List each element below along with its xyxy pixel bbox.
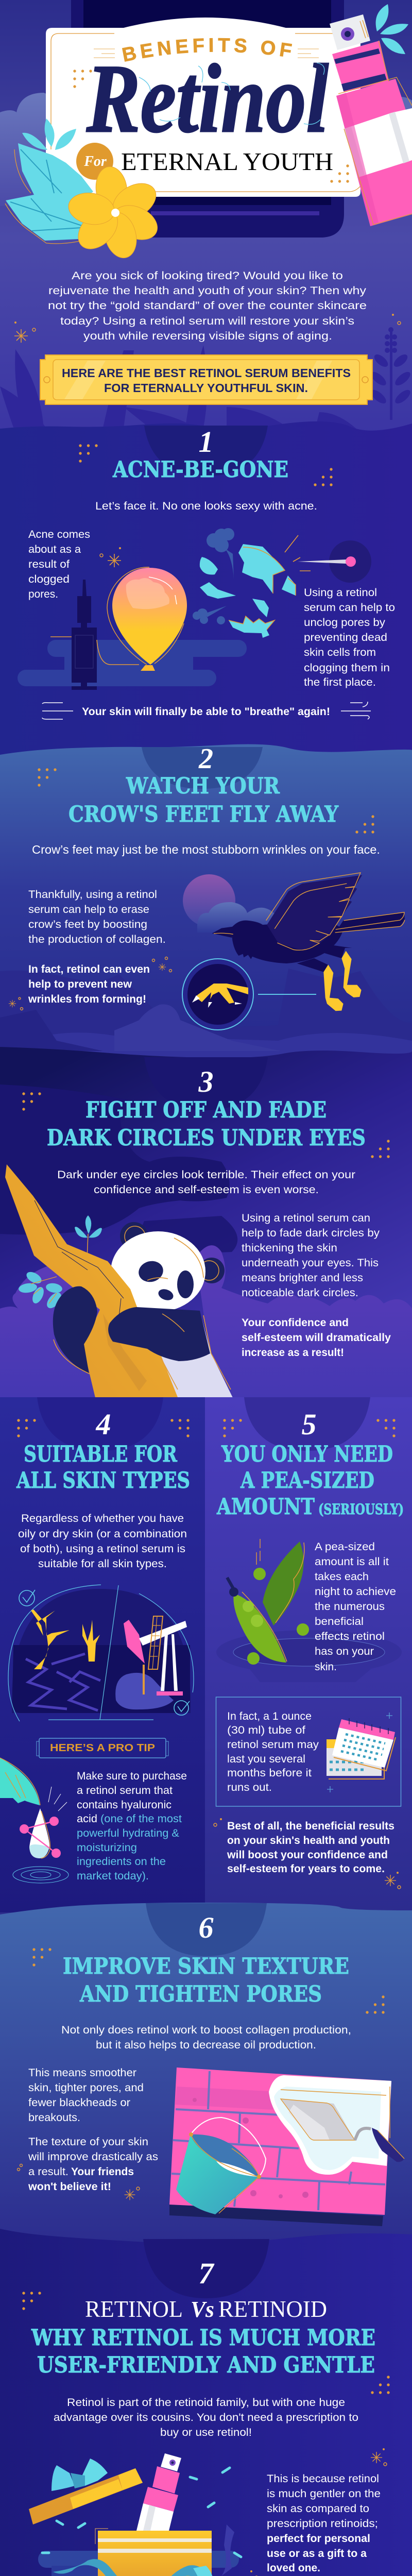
sparkles: section 1	[100, 547, 121, 567]
text: one ounce: retinol serum may	[227, 1739, 319, 1751]
badge: For: For	[83, 154, 107, 170]
title: Eternal Youth: ETERNAL YOUTH	[121, 147, 333, 176]
banner: best retinol serum benefits: HERE ARE THE BEST RETINOL SERUM BENEFITS	[62, 366, 351, 380]
text: gentler on skin: is much gentler on the	[267, 2488, 381, 2500]
panel: section 5 background	[205, 1397, 412, 1912]
illustration: leaf, drop and molecules	[0, 1758, 68, 1883]
dots: section 5 left	[223, 1419, 242, 1437]
icon: leaves on branch	[18, 1215, 102, 1311]
text: fade dark circles: noticeable dark circles.	[242, 1287, 358, 1299]
intro text section 6: Not only does retinol work to boost collagen production,	[61, 2024, 351, 2036]
text: texture improves: will improve drastically as	[28, 2151, 158, 2163]
text: confidence increases: self-esteem will dramatically	[242, 1332, 391, 1344]
text: best of all: will boost your confidence and	[227, 1849, 388, 1861]
text: thankfully: the production of collagen.	[28, 934, 166, 945]
text: best of all	[227, 1820, 394, 1875]
heading: watch your crow's feet: CROW'S FEET FLY AWAY	[68, 802, 339, 827]
dots: section 6 left	[32, 1948, 52, 1967]
text: gentler on skin: loved one.	[267, 2562, 320, 2574]
text: acne comes about	[28, 529, 90, 600]
text: pea-sized amount: takes each	[315, 1571, 369, 1583]
dots: section 1 right	[314, 468, 333, 486]
sparkles: section 7	[250, 2448, 387, 2576]
text: pro tip	[77, 1770, 187, 1882]
icon: ribbons	[53, 2524, 235, 2576]
text: gentler on skin: prescription retinoids;	[267, 2518, 378, 2530]
text: texture improves	[28, 2136, 158, 2193]
text: texture improves: Your friends	[71, 2166, 134, 2178]
text: confidence increases: increase as a result!	[242, 1347, 344, 1359]
dots: section 4 right	[170, 1419, 190, 1437]
foliage behind the banner	[0, 327, 412, 433]
icon: serum bottle in gift box	[136, 2453, 181, 2531]
banner: best retinol serum benefits	[40, 355, 372, 404]
sparkles: section 5	[214, 1818, 401, 1889]
text: pro tip: powerful hydrating &	[77, 1827, 179, 1839]
heading: improve skin texture: AND TIGHTEN PORES	[79, 1981, 322, 2007]
intro paragraph	[48, 270, 367, 342]
icon: yellow flower	[66, 165, 163, 262]
heading: retinol vs retinoid: Vs	[191, 2297, 214, 2322]
icon: pin	[285, 535, 371, 583]
text: pro tip: acid	[77, 1813, 97, 1825]
text: fade dark circles: thickening the skin	[242, 1242, 337, 1254]
background: dusk hills	[0, 969, 412, 1061]
heading: watch your crow's feet	[68, 773, 339, 827]
panel: hero background	[0, 0, 412, 433]
number 1: 1	[199, 425, 213, 459]
icon: balloon	[107, 567, 187, 671]
dots: section 3 left	[22, 1092, 41, 1111]
illustration: plastered brick wall	[169, 2067, 404, 2226]
text: regardless of skin: suitable for all skin types.	[38, 1558, 167, 1570]
title highlights	[139, 63, 324, 124]
text: fade dark circles: underneath your eyes. This	[242, 1257, 379, 1269]
heading: suitable for all skin types: SUITABLE FOR	[24, 1442, 177, 1467]
text: regardless of skin: of both), using a retinol serum is	[20, 1543, 185, 1555]
icon: calendars	[327, 1713, 396, 1792]
heading: fight off and fade	[47, 1097, 366, 1151]
icon: serum bottle	[330, 14, 412, 226]
sparkles: section 6	[18, 2164, 140, 2200]
number 4: 4	[96, 1408, 111, 1441]
text: gentler on skin: skin as compared to	[267, 2503, 369, 2515]
text: retinol serum unclogs pores: clogging them in	[304, 662, 390, 674]
intro text section 3: confidence and self-esteem is even worse.	[94, 1184, 319, 1196]
number 2: 2	[198, 743, 213, 775]
dots: section 7 right	[371, 2376, 390, 2394]
icon: crow	[212, 873, 405, 1011]
text: confidence increases: Your confidence and	[242, 1317, 349, 1329]
dots: section 7 left	[22, 2292, 41, 2310]
text: smoother skin: breakouts.	[28, 2112, 80, 2124]
text: pea-sized amount	[315, 1541, 396, 1673]
intro paragraph: not try the “gold standard” of over the counter skincare	[48, 300, 367, 312]
illustration: cloud platform	[18, 640, 247, 686]
intro text section 7	[54, 2397, 358, 2438]
text: acne comes about: Acne comes	[28, 529, 90, 540]
text: regardless of skin: oily or dry skin (or a combination	[18, 1528, 187, 1540]
text: in fact retinol: help to prevent new	[28, 978, 132, 990]
panel: section 4 background	[0, 1397, 205, 1912]
text: retinol serum unclogs pores	[304, 587, 395, 688]
text: one ounce: (30 ml) tube of	[227, 1724, 305, 1736]
text: smoother skin: fewer blackheads or	[28, 2097, 130, 2109]
text: one ounce	[227, 1710, 319, 1793]
background: purple bushes	[0, 1245, 412, 1404]
panel: section 7 background	[0, 2229, 412, 2576]
dots: section 4 left	[17, 1419, 36, 1437]
text: best of all: Best of all, the beneficial results	[227, 1820, 394, 1832]
dots: section 5 right	[376, 1419, 396, 1437]
text: best of all: self-esteem for years to come.	[227, 1863, 385, 1875]
text: acne comes about: pores.	[28, 588, 58, 600]
icon: panda	[5, 1164, 234, 1400]
heading: retinol vs retinoid: RETINOL	[85, 2296, 183, 2322]
icon: confetti	[42, 2468, 241, 2557]
text: pro tip: market today).	[77, 1870, 149, 1882]
dots: section 3 right	[371, 1140, 390, 1158]
text: retinol serum unclogs pores: the first place.	[304, 676, 376, 688]
text: gentler on skin: perfect for personal	[267, 2533, 370, 2545]
text: fade dark circles: Using a retinol serum can	[242, 1212, 370, 1224]
illustration: dry land and oil rig	[8, 1585, 194, 1721]
heading: pea-sized amount	[216, 1442, 404, 1520]
dots: section 2 right	[355, 815, 374, 834]
intro text section 3: Dark under eye circles look terrible. Their effect on your	[57, 1169, 355, 1181]
panel: section 1 background	[0, 421, 412, 757]
panel: section 6 background	[0, 1903, 412, 2246]
panel: section 3 background	[0, 1047, 412, 1404]
banner: best retinol serum benefits: FOR ETERNALLY YOUTHFUL SKIN.	[104, 381, 308, 395]
panel: dark frame behind the title card	[71, 0, 344, 238]
icon: bucket	[176, 2117, 266, 2214]
background: clouds	[114, 902, 281, 1051]
text: smoother skin	[28, 2067, 144, 2124]
panel: one ounce tube box	[216, 1697, 401, 1806]
number 6: 6	[199, 1911, 213, 1944]
text: gentler on skin: use or as a gift to a	[267, 2548, 367, 2560]
number bowl 1	[144, 426, 268, 476]
illustration: popped balloon pieces	[193, 528, 296, 638]
illustration: pea pods	[216, 1539, 402, 1682]
intro paragraph: Are you sick of looking tired? Would you like to	[72, 270, 343, 282]
text: retinol serum unclogs pores: serum can help to	[304, 602, 395, 614]
text: fade dark circles: means brighter and less	[242, 1272, 363, 1284]
intro paragraph: rejuvenate the health and youth of your skin? Then why	[48, 285, 367, 297]
dots: section 1 left	[79, 444, 98, 463]
text: thankfully: serum can help to erase	[28, 904, 149, 916]
heading: suitable for all skin types: ALL SKIN TYPES	[16, 1468, 190, 1494]
cloud: hero right	[391, 97, 412, 155]
text: regardless of skin	[18, 1513, 187, 1570]
text: smoother skin: skin, tighter pores, and	[28, 2082, 144, 2094]
text: pea-sized amount: skin.	[315, 1661, 337, 1673]
text: in fact retinol	[28, 963, 150, 1005]
text: pea-sized amount: the numerous	[315, 1601, 385, 1613]
icon: moon	[183, 874, 235, 927]
number bowl 3	[144, 1057, 268, 1110]
sparkles: intro left	[14, 321, 36, 343]
text: pro tip: (one of the most	[100, 1813, 182, 1825]
text: in fact retinol: In fact, retinol can even	[28, 963, 150, 975]
text: retinol serum unclogs pores: Using a retinol	[304, 587, 377, 599]
text: fade dark circles	[242, 1212, 380, 1299]
heading: fight off and fade: DARK CIRCLES UNDER EYES	[47, 1125, 366, 1151]
illustration: cloud platform section 7	[8, 2551, 239, 2576]
text: retinol serum unclogs pores: preventing dead	[304, 632, 387, 643]
icon: gift lid and bow	[29, 2459, 143, 2524]
text: acne comes about: result of	[28, 558, 70, 570]
text: pro tip: Make sure to purchase	[77, 1770, 187, 1782]
text: in fact retinol: wrinkles from forming!	[28, 993, 146, 1005]
text: pea-sized amount: A pea-sized	[315, 1541, 375, 1553]
intro text section 3	[57, 1169, 355, 1196]
number bowl 7	[143, 2239, 269, 2298]
heading: acne-be-gone: ACNE-BE-GONE	[112, 457, 288, 483]
heading: retinol vs retinoid	[31, 2296, 375, 2378]
text: thankfully: crow’s feet by boosting	[28, 919, 147, 930]
intro text section 7: buy or use retinol!	[160, 2427, 252, 2438]
cloud: hero left	[0, 93, 52, 206]
text: best of all: on your skin's health and youth	[227, 1835, 390, 1846]
number bowl 6	[146, 1903, 267, 1956]
text: texture improves: a result.	[28, 2166, 68, 2178]
icon: leaves left	[5, 118, 93, 244]
background: dark tree silhouette	[0, 1084, 237, 1252]
text: pro tip: contains hyaluronic	[77, 1799, 171, 1811]
text: fade dark circles: help to fade dark circles by	[242, 1227, 380, 1239]
callout: pro tip label	[37, 1738, 168, 1758]
intro paragraph: today? Using a retinol serum will restore your skin’s	[60, 315, 354, 327]
heading: fight off and fade: FIGHT OFF AND FADE	[85, 1097, 327, 1123]
intro text section 6	[61, 2024, 351, 2051]
text: pro tip: a retinol serum that	[77, 1785, 173, 1797]
text: one ounce: runs out.	[227, 1782, 272, 1793]
dots: section 6 right	[366, 1995, 385, 2014]
intro paragraph: youth while reversing visible signs of aging.	[83, 330, 332, 342]
text: one ounce: months before it	[227, 1767, 312, 1779]
number 3: 3	[198, 1065, 213, 1098]
text: pea-sized amount: beneficial	[315, 1616, 364, 1628]
text: smoother skin: This means smoother	[28, 2067, 136, 2079]
callout: crow foot magnifier	[182, 959, 316, 1030]
heading: pea-sized amount: AMOUNT	[216, 1494, 315, 1520]
text: one ounce: last you several	[227, 1753, 305, 1765]
number 7: 7	[199, 2257, 214, 2290]
panel: title card	[46, 18, 360, 197]
intro text section 2: Crow’s feet may just be the most stubborn wrinkles on your face.	[32, 843, 380, 856]
text: pro tip: ingredients on the	[77, 1856, 166, 1868]
heading: improve skin texture	[63, 1954, 349, 2007]
text: one ounce: In fact, a 1 ounce	[227, 1710, 312, 1722]
heading: pea-sized amount: A PEA-SIZED	[240, 1468, 374, 1494]
text: texture improves: won't believe it!	[28, 2181, 111, 2193]
heading: retinol vs retinoid: RETINOID	[218, 2296, 327, 2322]
heading: suitable for all skin types	[16, 1442, 190, 1494]
intro text section 7: advantage over its cousins. You don't need a prescription to	[54, 2412, 358, 2424]
sparkles: section 2	[9, 957, 171, 1010]
text: thankfully: Thankfully, using a retinol	[28, 889, 157, 901]
text: pea-sized amount: amount is all it	[315, 1556, 389, 1568]
number 5: 5	[302, 1408, 316, 1441]
text: pea-sized amount: has on your	[315, 1646, 374, 1657]
dots: title card	[73, 70, 92, 88]
title: Benefits of: BENEFITS OF	[122, 38, 293, 62]
intro text section 1: Let’s face it. No one looks sexy with acne.	[95, 500, 317, 512]
sparkles: intro right	[392, 314, 401, 325]
text: texture improves: The texture of your skin	[28, 2136, 148, 2148]
heading: improve skin texture: IMPROVE SKIN TEXTURE	[63, 1954, 349, 1979]
text: regardless of skin: Regardless of whether you have	[21, 1513, 184, 1524]
number bowl 4	[37, 1397, 163, 1451]
text: acne comes about: about as a	[28, 544, 81, 555]
panel: section 2 background	[0, 744, 412, 1069]
text: gentler on skin	[267, 2473, 381, 2574]
callout: pro tip label: HERE’S A PRO TIP	[50, 1742, 155, 1754]
number bowl 2	[142, 747, 263, 789]
icon: syringe	[50, 580, 139, 690]
intro text section 7: Retinol is part of the retinoid family, but with one huge	[67, 2397, 345, 2409]
text: confidence increases	[242, 1317, 391, 1359]
text: retinol serum unclogs pores: unclog pores by	[304, 617, 386, 629]
number bowl 5	[244, 1397, 370, 1451]
callout: skin can breathe: Your skin will finally be able to "breathe" again!	[82, 706, 330, 718]
text: pea-sized amount: effects retinol	[315, 1631, 385, 1642]
dots: title card lower	[330, 164, 349, 183]
text: thankfully	[28, 889, 166, 945]
callout: skin can breathe	[42, 702, 371, 719]
text: retinol serum unclogs pores: skin cells from	[304, 647, 376, 658]
dots: section 2 left	[38, 768, 57, 787]
text: pea-sized amount: night to achieve	[315, 1586, 396, 1598]
text: pro tip: moisturizing	[77, 1842, 137, 1854]
badge: For	[76, 143, 113, 180]
title: Retinol: Retinol	[86, 45, 329, 153]
heading: watch your crow's feet: WATCH YOUR	[126, 773, 280, 799]
intro text section 6: but it also helps to decrease oil production.	[96, 2039, 316, 2051]
icon: small leaves top right	[376, 4, 408, 54]
text: acne comes about: clogged	[28, 573, 70, 585]
text: gentler on skin: This is because retinol	[267, 2473, 379, 2485]
icon: gift box	[95, 2529, 212, 2576]
